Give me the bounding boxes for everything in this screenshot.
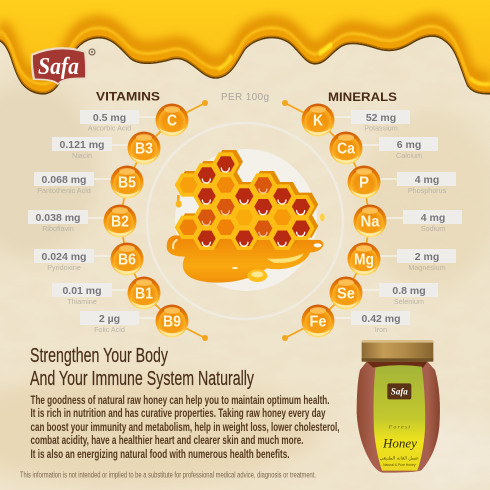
- minerals column: [302, 104, 462, 338]
- vitamin B5: B5: [118, 174, 136, 192]
- iron: Fe: [310, 314, 327, 330]
- magnesium: 2 mg: [415, 251, 439, 263]
- sodium: Na: [360, 214, 380, 230]
- vitamin B6: [34, 242, 144, 276]
- iron: [302, 304, 410, 338]
- body text: combat acidity, have a healthier heart and clearer skin and much more.: [30, 435, 304, 447]
- disclaimer: This information is not intended or implied to be a substitute for professional medical advice, diagnosis or treatment.: [20, 470, 316, 480]
- iron: 0.42 mg: [361, 313, 401, 325]
- vitamin B5: [34, 166, 144, 198]
- honeycomb illustration: [167, 154, 325, 283]
- magnesium: Mg: [354, 252, 374, 268]
- potassium: [302, 104, 410, 136]
- body text: The goodness of natural raw honey can help you to maintain optimum health.: [30, 395, 330, 407]
- honey jar: Forest: [388, 424, 411, 430]
- vitamin B1: [52, 276, 160, 310]
- body text: It is also an energizing natural food with numerous health benefits.: [30, 449, 290, 461]
- sodium: [354, 204, 462, 238]
- vitamin B1: 0.01 mg: [62, 285, 102, 297]
- calcium: Ca: [337, 140, 355, 158]
- vitamin B5: 0.068 mg: [42, 174, 86, 186]
- cell fills repainted above merged borders: [179, 156, 310, 246]
- vitamin B1: Thiamine: [67, 297, 97, 306]
- vitamin B1: B1: [135, 286, 153, 302]
- phosphorus: Phosphorus: [408, 186, 447, 195]
- vitamin C: [80, 104, 188, 136]
- connectors: [120, 100, 370, 341]
- selenium: Se: [337, 286, 355, 302]
- cell highlights: [202, 168, 305, 246]
- heading: vitamins: VITAMINS: [96, 92, 160, 104]
- vitamin C: 0.5 mg: [93, 112, 126, 124]
- comb side shadow: [183, 154, 314, 244]
- sodium: 4 mg: [421, 212, 445, 224]
- iron: Iron: [375, 325, 387, 334]
- vitamin B6: B6: [118, 252, 136, 268]
- honey jar: Honey: [382, 436, 417, 451]
- magnesium: [348, 242, 456, 276]
- main heading: [30, 345, 254, 390]
- logo: Safa: Safa: [38, 54, 79, 80]
- vitamin B6: Pyridoxine: [47, 263, 81, 272]
- hex cells: [179, 156, 310, 246]
- vitamin B2: Riboflavin: [42, 224, 74, 233]
- selenium: [330, 276, 438, 310]
- vitamin B3: [52, 132, 160, 164]
- body text: It is rich in nutrition and has curative properties. Taking raw honey every day: [30, 408, 326, 420]
- phosphorus: [348, 166, 456, 198]
- sodium: Sodium: [421, 224, 445, 233]
- honey jar: Natural & Pure Honey: [383, 463, 416, 467]
- heading: per 100g: PER 100g: [221, 92, 269, 103]
- vitamin B6: 0.024 mg: [42, 251, 86, 263]
- body text: can boost your immunity and metabolism, help in weight loss, lower cholesterol,: [30, 422, 340, 434]
- vitamin B2: 0.038 mg: [36, 212, 80, 224]
- honey jar: [357, 340, 440, 473]
- vitamin B2: B2: [111, 214, 129, 230]
- phosphorus: 4 mg: [415, 174, 439, 186]
- selenium: Selenium: [394, 297, 424, 306]
- calcium: 6 mg: [397, 139, 421, 151]
- vitamin B5: Pantothenic Acid: [37, 186, 91, 195]
- vitamin C: Ascorbic Acid: [88, 124, 131, 132]
- decorative ring: [147, 123, 343, 319]
- honey jar: عسل الغابة الطبيعي: [380, 455, 419, 461]
- phosphorus: P: [359, 174, 369, 192]
- potassium: 52 mg: [366, 112, 396, 124]
- selenium: 0.8 mg: [392, 285, 426, 297]
- vitamin B9: [80, 304, 188, 338]
- vitamin B9: 2 µg: [99, 313, 120, 325]
- white disc: [175, 149, 317, 291]
- logo: Safa: [31, 47, 95, 86]
- vitamin C: C: [167, 112, 177, 130]
- vitamin B3: B3: [135, 140, 153, 158]
- vitamin B2: [28, 204, 136, 238]
- potassium: Potassium: [364, 124, 398, 132]
- magnesium: Magnesium: [408, 263, 446, 272]
- potassium: K: [313, 112, 323, 130]
- heading: minerals: MINERALS: [328, 92, 397, 104]
- main heading: Strengthen Your Body: [30, 345, 168, 367]
- body text: [30, 395, 340, 461]
- vitamin B3: 0.121 mg: [60, 139, 104, 151]
- honey jar: Safa: [391, 387, 408, 397]
- main heading: And Your Immune System Naturally: [30, 368, 254, 390]
- calcium: [330, 132, 438, 164]
- calcium: Calcium: [396, 151, 422, 160]
- honey drip top: [0, 0, 490, 100]
- vitamin B3: Niacin: [72, 151, 92, 160]
- vitamins column: [28, 104, 188, 338]
- vitamin B9: B9: [163, 314, 181, 330]
- vitamin B9: Folic Acid: [94, 325, 125, 334]
- honey puddle: [167, 235, 323, 283]
